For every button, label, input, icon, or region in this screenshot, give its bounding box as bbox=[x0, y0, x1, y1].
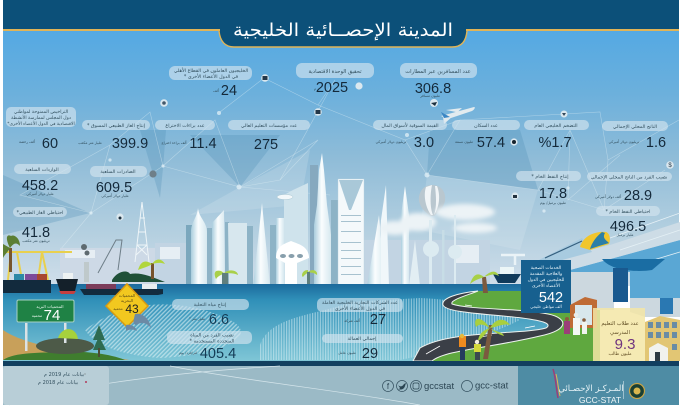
workers bbox=[459, 334, 481, 360]
background skyline bbox=[60, 240, 490, 286]
title: المدينة الإحصــائية الخليجية bbox=[233, 20, 453, 41]
city palms bbox=[215, 270, 317, 286]
metric: licenses: دول المجلس لممارسة الأنشطة bbox=[11, 114, 71, 121]
metric: private sector workers bbox=[169, 66, 269, 99]
metric: inflation: %1.7 bbox=[538, 135, 572, 151]
logo panel: GCC-STAT bbox=[518, 366, 679, 405]
containers and ships bbox=[3, 273, 163, 295]
metric: airport passengers: 306.8 bbox=[415, 81, 451, 97]
metric: desalinated water: مليار متر ³ bbox=[189, 317, 205, 321]
metric: stock value: القيمة السوقية لأسواق المال bbox=[381, 122, 439, 129]
metric: gas reserves: 41.8 bbox=[22, 225, 50, 241]
metric: crude reserves: احتياطي النفط الخام * bbox=[606, 209, 650, 215]
palm left bbox=[3, 235, 20, 272]
social media: gcc-stat bbox=[475, 380, 509, 392]
metric: exports bbox=[90, 166, 157, 198]
social media bbox=[382, 380, 509, 392]
metric: licenses: 60 bbox=[42, 136, 58, 152]
school panel: مليون طالب bbox=[608, 352, 632, 357]
beach bbox=[3, 330, 130, 360]
tree and bush bbox=[58, 325, 106, 357]
metric: higher education: عدد مؤسسات التعليم العالي bbox=[241, 123, 297, 129]
metric: exports: مليار دولار أميركي bbox=[101, 193, 129, 198]
family bbox=[564, 313, 587, 335]
palm tree upper road bbox=[470, 272, 499, 293]
metric: private sector workers: في الدول الأعضاء الأخرى * bbox=[184, 73, 238, 80]
metric: desalinated water: إنتاج مياه التحلية bbox=[194, 302, 227, 308]
metric: imports: 458.2 bbox=[22, 178, 58, 194]
metric: GDP: 1.6 bbox=[646, 135, 666, 151]
dolphins bbox=[126, 314, 151, 331]
metric: per capita: نصيب الفرد من الناتج المحلي الإجمالي bbox=[591, 174, 667, 180]
metric: crude reserves: مليار برميل bbox=[617, 233, 634, 237]
metric: GDP: الناتج المحلي الإجمالي bbox=[613, 124, 657, 130]
logo panel: GCC-STAT: GCC-STAT bbox=[579, 395, 621, 405]
metric: companies: عدد الشركات التجارية الخليجية العاملة bbox=[322, 300, 398, 306]
crane and tower bbox=[81, 240, 165, 282]
brick building bbox=[570, 297, 597, 328]
school panel bbox=[593, 308, 680, 361]
metric: marketed gas: 399.9 bbox=[112, 136, 148, 152]
land and road bbox=[413, 291, 600, 361]
metric: companies: 27 bbox=[370, 312, 386, 328]
metric: private sector workers: 24 bbox=[221, 83, 237, 99]
water patterns bbox=[85, 298, 520, 360]
info panel: health services: الأعضاء الأخرى bbox=[532, 282, 560, 289]
water tower bbox=[276, 241, 309, 313]
palm tree mid right bbox=[475, 319, 510, 359]
social media: f bbox=[387, 382, 390, 391]
school panel: عدد طلاب التعليم bbox=[601, 321, 639, 327]
info panel: health services: والعلاجية المقدمة bbox=[530, 272, 562, 277]
legend: بيانات عام 2018 م bbox=[38, 380, 78, 386]
metric: population: 57.4 bbox=[477, 135, 505, 151]
school panel: 9.3 bbox=[615, 336, 635, 353]
metric: water share: نصيب الفرد من المياه bbox=[190, 332, 234, 338]
metric: gas reserves: احتياطي الغاز الطبيعي* bbox=[17, 210, 63, 216]
metric: crude reserves: 496.5 bbox=[610, 219, 646, 235]
school panel: المدرسي bbox=[610, 330, 630, 336]
metric: GDP bbox=[602, 121, 668, 151]
yellow marine sign: محمية bbox=[113, 307, 123, 311]
metric: crude production: مليون برميل/ يوم bbox=[540, 201, 566, 206]
Kuwait towers bbox=[423, 215, 462, 286]
info panel: health services: ألف مواطن خليجي bbox=[530, 304, 562, 309]
legend bbox=[3, 366, 109, 405]
social media: gccstat bbox=[424, 381, 454, 392]
metric: water share: المتجددة المستخدمة * bbox=[190, 338, 234, 344]
metric: stock value bbox=[373, 120, 447, 151]
metric: GDP: تريليون دولار أميركي bbox=[609, 139, 639, 144]
metric: licenses: الاقتصادية في الدول الأعضاء الأخرى* bbox=[7, 120, 75, 127]
city towers bbox=[186, 153, 420, 286]
yellow marine sign: 43 bbox=[125, 302, 139, 316]
metric: per capita bbox=[587, 161, 674, 204]
title bbox=[219, 20, 467, 47]
metric: marketed gas bbox=[78, 120, 150, 152]
metric: economic union: 2025 bbox=[316, 80, 348, 96]
green road sign bbox=[17, 300, 74, 351]
ship and crane right bbox=[493, 255, 525, 283]
metric: economic union bbox=[296, 63, 374, 96]
metric: airport passengers: مليون مسافر bbox=[419, 94, 440, 98]
metric: private sector workers: ألف bbox=[213, 88, 219, 93]
metric: stock value: تريليون دولار أميركي bbox=[376, 139, 406, 144]
legend: بيانات عام 2019 م bbox=[44, 372, 84, 378]
metric: airport passengers bbox=[400, 63, 477, 107]
metric: desalinated water bbox=[172, 299, 249, 328]
clouds bbox=[379, 204, 497, 235]
metric: marketed gas: مليار متر مكعب bbox=[78, 141, 102, 145]
info panel: health services: الخدمات الصحية bbox=[531, 266, 561, 271]
metric: gas reserves: تريليون متر مكعب bbox=[22, 239, 50, 243]
monorail bridge bbox=[537, 213, 680, 317]
metric: inflation: التضخم الخليجي العام bbox=[534, 123, 578, 129]
header band bbox=[3, 0, 679, 31]
logo panel: GCC-STAT: المـركـز الإحصـائي bbox=[558, 384, 624, 394]
metric: licenses: التراخيص الممنوحة لمواطني bbox=[14, 110, 68, 115]
green road sign: محمية bbox=[32, 313, 42, 318]
metric: crude production bbox=[511, 171, 581, 206]
hot air balloon bbox=[419, 185, 445, 216]
metric: patents: عدد براءات الاختراع bbox=[165, 123, 205, 129]
metric: per capita: $ bbox=[668, 163, 672, 169]
footer bbox=[3, 361, 679, 405]
metric: water share: لتر/فرد/ يوم bbox=[179, 351, 197, 356]
yellow marine sign: المحميات bbox=[119, 293, 135, 298]
metric: gas reserves bbox=[13, 207, 124, 243]
palm island bbox=[138, 259, 165, 279]
metric: airport passengers: عدد المسافرين عبر المطارات bbox=[405, 69, 471, 75]
metric: population: مليون نسمة bbox=[455, 140, 473, 144]
metric: exports: الصادرات السلعية bbox=[100, 169, 136, 175]
metric: water share bbox=[167, 331, 252, 362]
metric: private sector workers: الخليجيون العاملون في القطاع الأهلي bbox=[174, 67, 248, 74]
metric: imports: الواردات السلعية bbox=[25, 167, 59, 173]
green road sign: المحميات البرية bbox=[36, 304, 64, 309]
metric: economic union: م bbox=[314, 87, 316, 92]
icon: airplane bbox=[441, 107, 475, 124]
metric: desalinated water: 6.6 bbox=[209, 312, 229, 328]
metric: patents: 11.4 bbox=[189, 136, 217, 152]
metric: labor force: مليون عامل bbox=[338, 351, 356, 355]
metric: patents bbox=[155, 99, 217, 152]
metric: per capita: 28.9 bbox=[624, 188, 652, 204]
metric: marketed gas: إنتاج الغاز الطبيعي المسوق * bbox=[87, 123, 146, 129]
metric: per capita: ألف دولار أميركي bbox=[595, 194, 621, 199]
metric: crude production: 17.8 bbox=[539, 186, 567, 202]
metric: population bbox=[452, 120, 520, 151]
info panel: health services bbox=[521, 260, 571, 313]
metric: patents: ألف براءة اختراع bbox=[161, 140, 187, 145]
metric: exports: 609.5 bbox=[96, 180, 132, 196]
metric: licenses bbox=[6, 107, 76, 152]
metric: higher education bbox=[228, 108, 322, 153]
metric: companies bbox=[317, 298, 403, 328]
metric: companies: ألف شركة bbox=[344, 318, 360, 323]
metric: water share: 405.4 bbox=[200, 346, 236, 362]
left port: yellow cranes bbox=[3, 252, 72, 280]
metric: population: عدد السكان bbox=[474, 123, 498, 129]
metric: inflation bbox=[524, 110, 589, 151]
metric: crude production: إنتاج النفط الخام * bbox=[531, 174, 569, 180]
green road sign: 74 bbox=[44, 307, 60, 324]
metric: labor force: 29 bbox=[362, 346, 378, 362]
metric: crude reserves bbox=[596, 206, 660, 237]
sea bbox=[3, 284, 598, 361]
metric: higher education: 275 bbox=[254, 137, 278, 153]
metric: stock value: 3.0 bbox=[414, 135, 434, 151]
oil rig bbox=[135, 202, 149, 262]
metric: economic union: تحقيق الوحدة الاقتصادية bbox=[308, 69, 362, 75]
metric: labor force: إجمالي العمالة bbox=[348, 336, 377, 342]
info panel: health services: 542 bbox=[539, 290, 563, 306]
metric: labor force bbox=[322, 334, 403, 362]
yellow marine sign bbox=[106, 284, 148, 327]
metric: imports bbox=[14, 164, 71, 196]
sky background bbox=[3, 30, 679, 286]
metric: companies: في الدول الأعضاء الأخرى bbox=[335, 305, 385, 312]
metric: licenses: ألف رخصة bbox=[19, 139, 35, 144]
yellow marine sign: البحرية bbox=[121, 298, 133, 303]
info panel: health services: للخليجيين في الدول bbox=[528, 278, 564, 283]
metric: imports: مليار دولار أميركي bbox=[26, 191, 54, 196]
